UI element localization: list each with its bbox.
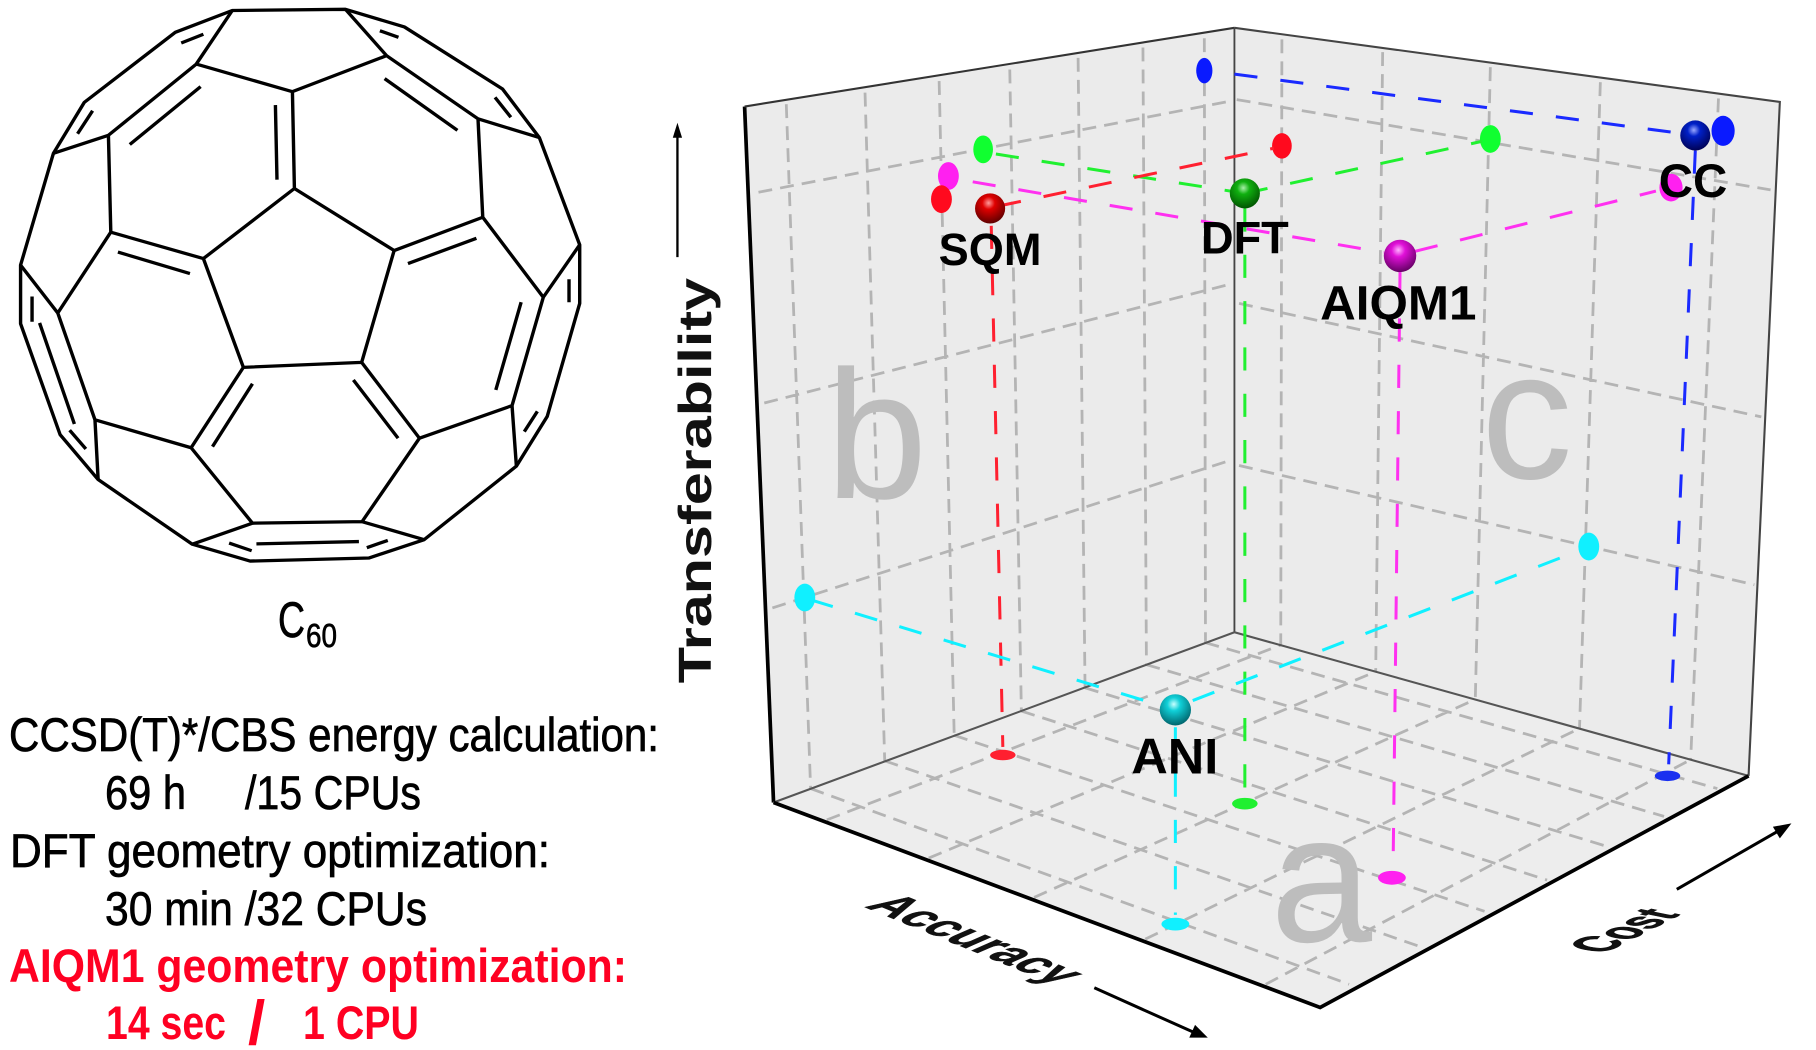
sphere: DFT (1230, 178, 1260, 208)
sphere: SQM (975, 193, 1005, 223)
wall b (745, 28, 1234, 802)
C60 label (278, 592, 337, 654)
timing comparison text block: 14 sec (106, 996, 226, 1049)
label: DFT: DFT (1201, 213, 1289, 264)
label: SQM: SQM (939, 224, 1042, 275)
C60 fullerene structure (21, 9, 580, 561)
sphere: AIQM1 (1384, 240, 1416, 272)
timing comparison text block: DFT geometry optimization: (10, 824, 550, 877)
watermark letter b: b (826, 332, 927, 537)
timing comparison text block: /15 CPUs (245, 766, 421, 819)
arrow: Transferability (673, 123, 682, 257)
arrow: Accuracy (1094, 988, 1208, 1038)
sphere: CC (1680, 120, 1710, 151)
wall c (1234, 28, 1780, 776)
timing comparison text block: AIQM1 geometry optimization: (9, 939, 627, 992)
timing comparison text block: CCSD(T)*/CBS energy calculation: (9, 708, 659, 761)
3D chart (669, 28, 1791, 1038)
arrow: Cost (1677, 823, 1791, 889)
timing comparison text block: 30 min /32 CPUs (105, 882, 427, 935)
watermark letter c: c (1481, 312, 1573, 517)
floor a (774, 632, 1749, 1007)
sphere: ANI (1160, 694, 1191, 725)
C60 label: 60 (306, 617, 337, 654)
axis label: Transferability: Transferability (669, 278, 721, 683)
timing comparison text block: 69 h (105, 766, 186, 819)
label: CC: CC (1659, 155, 1727, 208)
projection points (794, 58, 1735, 930)
C60 label: C (278, 592, 305, 648)
label: ANI: ANI (1131, 729, 1218, 785)
timing comparison text block: 1 CPU (303, 996, 419, 1049)
watermark letter a: a (1270, 775, 1372, 980)
timing comparison text block (9, 708, 659, 1050)
dashed projection lines (811, 74, 1695, 915)
axis label: Cost: Cost (1555, 905, 1693, 957)
label: AIQM1: AIQM1 (1320, 277, 1476, 331)
axis label: Accuracy: Accuracy (853, 888, 1100, 990)
